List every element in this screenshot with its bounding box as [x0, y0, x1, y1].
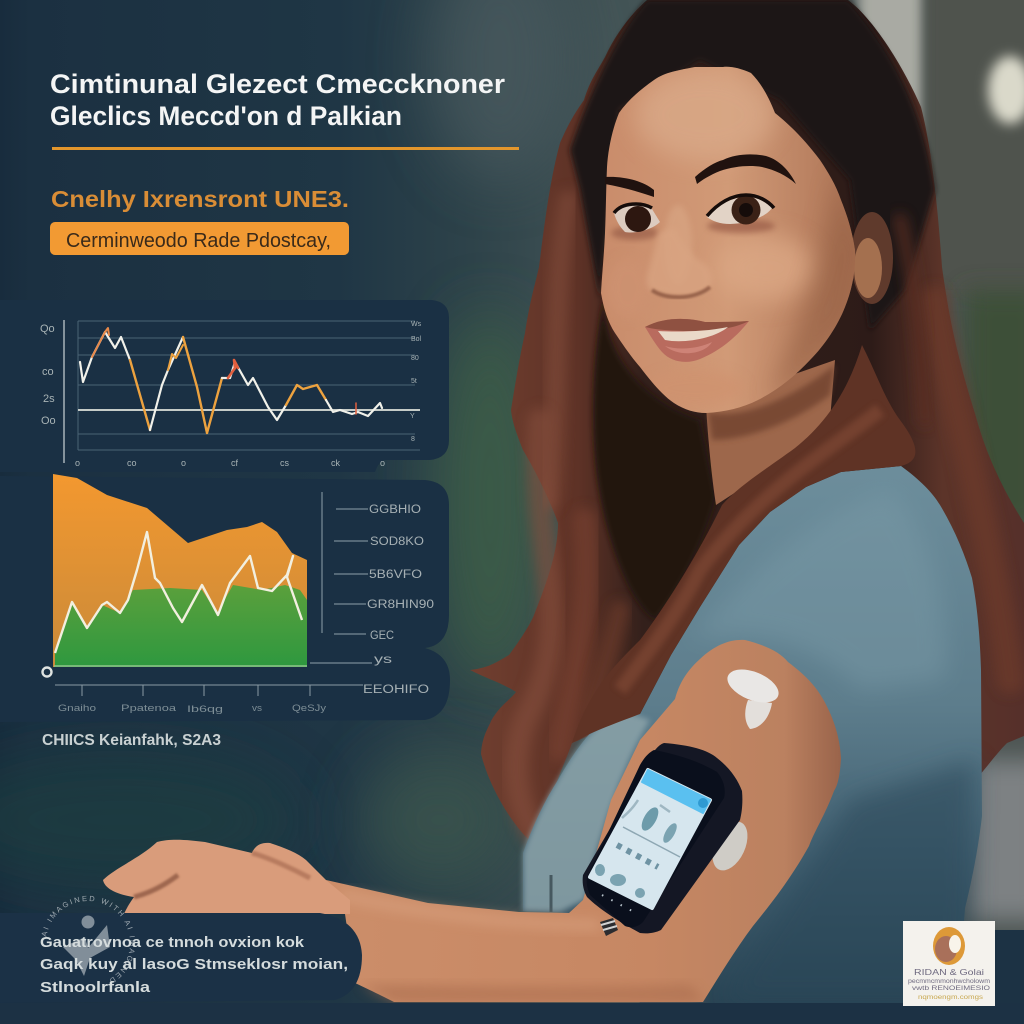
note text: Gauatrovnoa ce tnnoh ovxion kok [40, 934, 305, 951]
logo text: vwtb RENOEIMESIO [912, 985, 990, 992]
shirt [523, 466, 982, 1003]
axis labels [40, 321, 422, 468]
watermark badge: AI IMAGINED WITH AI IMAGINED [42, 896, 136, 983]
axis labels: ck [331, 458, 340, 468]
hand [103, 840, 350, 914]
eyes [614, 195, 774, 233]
legend labels: GEC [370, 630, 394, 642]
shirt left lobe [523, 710, 650, 912]
axis labels: Ws [411, 321, 422, 328]
panel: area chart: vs [252, 703, 262, 714]
upper arm and forearm [326, 640, 841, 1002]
axis labels: o [181, 458, 186, 468]
smartphone on armband [583, 743, 742, 936]
axis labels: 80 [411, 355, 419, 362]
axis labels: o [75, 458, 80, 468]
axis labels: 8 [411, 436, 415, 443]
orange subtitle: Cnelhy Ixrensront UNE3. [51, 186, 349, 212]
panel: area chart: Ib6qg [187, 704, 223, 715]
note text [40, 934, 348, 996]
axis labels: co [42, 366, 54, 378]
logo emblem [933, 927, 965, 965]
note text: Stlnoolrfanla [40, 979, 151, 996]
dark under-face hair [593, 290, 716, 620]
logo text: RIDAN & Golai [914, 968, 984, 977]
legend labels: SOD8KO [370, 536, 424, 548]
legend labels [310, 504, 434, 696]
chart caption: CHIICS Keianfahk, S2A3 [42, 732, 221, 749]
front hair sweep [572, 345, 915, 743]
title rule [52, 147, 519, 150]
title: Gleclics Meccd'on d Palkian [50, 101, 402, 131]
green area [55, 585, 307, 667]
nose [647, 228, 712, 297]
panel: area chart: Gnaiho [58, 703, 96, 714]
axis labels: 2s [43, 393, 55, 405]
legend labels: EEOHIFO [363, 684, 429, 696]
axis labels: Oo [41, 415, 56, 427]
x axis [55, 685, 363, 696]
white trace [55, 532, 302, 653]
bottom dark strip [0, 1003, 1024, 1024]
panel: line chart [0, 300, 449, 472]
white sensor patch [723, 663, 783, 729]
legend labels: ys [374, 654, 392, 666]
panel: area chart [0, 474, 450, 722]
ear [851, 212, 893, 304]
axis labels: o [380, 458, 385, 468]
legend labels: 5B6VFO [369, 569, 422, 581]
panel: area chart: QeSJy [292, 703, 326, 714]
axis labels: co [127, 458, 137, 468]
title: Cimtinunal Glezect Cmeccknoner [50, 69, 506, 99]
orange label badge: Cerminweodo Rade Pdostcay, [66, 230, 331, 252]
face [601, 67, 865, 413]
logo text [908, 968, 990, 1001]
round adhesive patch [705, 816, 755, 876]
chart origin marker [42, 668, 52, 676]
chart grid [78, 321, 420, 450]
panel: area chart: Ppatenoa [121, 703, 177, 714]
mouth [645, 319, 749, 362]
under-eye shadows [611, 226, 659, 240]
logo text: nqmoengm.comgs [918, 994, 984, 1001]
legend labels: GR8HIN90 [367, 599, 434, 611]
axis labels: 5t [411, 378, 417, 385]
phone connector [600, 918, 618, 936]
note text: Gaqk kuy al lasoG Stmseklosr moian, [40, 956, 348, 973]
neck [706, 360, 835, 505]
reddish hair streaks [516, 200, 1010, 835]
logo text: pecmmcmmonhwcholowm [908, 978, 990, 985]
orange area [53, 474, 307, 667]
axis labels: Bol [411, 336, 422, 343]
shirt sleeve highlight [690, 490, 946, 690]
glucose trace [80, 328, 382, 433]
axis labels: Y [410, 413, 415, 420]
title [50, 69, 506, 131]
orange label badge [50, 222, 349, 255]
legend labels: GGBHIO [369, 504, 421, 516]
axis labels: cs [280, 458, 290, 468]
axis labels: cf [231, 458, 238, 468]
panel: bottom note [0, 896, 362, 1002]
axis labels: Qo [40, 323, 55, 335]
dark crown of hair [570, 0, 935, 330]
eyebrows [605, 177, 654, 197]
back hair [470, 0, 1024, 847]
logo card [903, 921, 995, 1006]
